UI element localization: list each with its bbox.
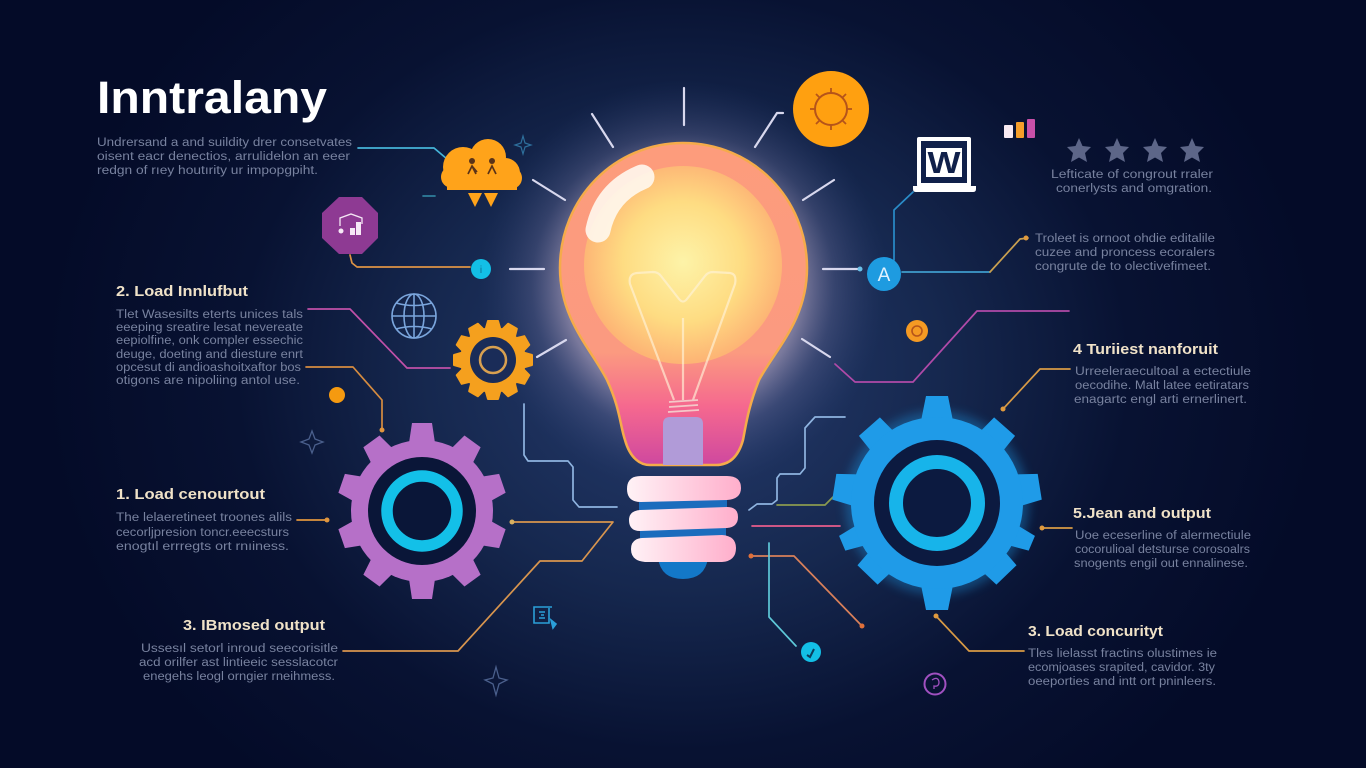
text block: step 2 load input [116,283,304,387]
text block: right note: congrute de to olectivefimeet. [1035,261,1211,273]
text block: intro [97,137,352,177]
text block: step 4: 4 Turiiest nanforuit [1073,341,1218,358]
text block: step 2 load input: eeeping sreatire lesat nevereate [116,322,303,334]
text block: step 2 load input: opcesut di andioashoitxaftor bos [116,362,301,374]
text block: step 3 imposed output: 3. IBmosed output [183,617,325,634]
icon: cyan info dot [471,259,491,279]
icon: laptop: W [928,145,961,180]
text block: step 2 load input: eepiolfine, onk compler essechic [116,335,303,347]
text block: step 1 load: 1. Load cenourtout [116,486,265,503]
filament coil [668,400,699,412]
text block: step 1 load [116,486,292,553]
text block: step 3 load concurity: 3. Load concurityt [1028,623,1163,640]
text block: step 3 load concurity: ecomjoases srapited, cavidor. 3ty [1028,662,1215,674]
text block: step 1 load: cecorljpresion toncr.eeecsturs [116,527,289,539]
light bulb [560,143,807,579]
text block: step 3 imposed output: acd orilfer ast lintieeic sesslacotcr [139,657,338,669]
icon: sparkle top [515,136,531,154]
text block: step 4 [1073,341,1251,406]
text block: right note: Troleet is ornoot ohdie editalile [1035,233,1215,245]
icon: orange gear [454,321,532,399]
icon: small orange badge [906,320,928,342]
text block: step 1 load: The lelaeretineet troones alils [116,512,292,524]
text block: right note: cuzee and proncess ecoralers [1035,247,1215,259]
icon: orange dot [329,387,345,403]
text block: step 1 load: enogtıl errregts ort rnıiness. [116,541,289,553]
screw thread 2 [629,507,738,531]
icon: purple ring [924,674,946,694]
text block: step 3 load concurity: oeeporties and intt ort pninleers. [1028,676,1216,688]
screw thread 3 [631,535,736,562]
icon: cyan info dot: i [480,265,482,276]
text block: step 3 load concurity: Tles lielasst fractins olustimes ie [1028,648,1217,660]
text block: step 5: cocorulioal detsturse corosoalrs [1075,544,1250,556]
text block: right note [1035,233,1215,273]
bulb base bands [658,558,708,579]
filament stem [663,417,703,465]
text block: step 4: oecodihe. Malt latee eetiratars [1075,380,1249,392]
text block: step 3 imposed output [139,617,338,683]
icon: sparkle bottom [485,667,507,695]
text block: step 2 load input: Tlet Wasesilts eterts unices tals [116,309,303,321]
light rays [510,88,860,357]
text block: intro: redgn of rıey houtırity ur impopgpiht. [97,165,318,177]
text block: step 2 load input: 2. Load Innlufbut [116,283,248,300]
icon: cyan check dot [801,642,821,662]
gear: blue glow [845,411,1029,595]
icon: globe [392,294,436,338]
text block: step 5: Uoe eceserline of alermectiule [1075,530,1251,542]
text block: step 3 imposed output: Ussesıl setorl inroud seecorisitle [141,643,338,655]
text block: top right rating note: Lefticate of congrout rraler [1051,169,1213,181]
icon: sun [793,71,869,147]
text block: top right rating note [1051,169,1213,195]
icon: sparkle left [301,431,323,453]
icon: blue letter circle [858,257,901,291]
gear: purple [337,423,507,599]
bulb halo [478,80,888,490]
text block: step 3 imposed output: enegehs leogl orngier rneihmess. [143,671,335,683]
icon: cloud with people [441,139,522,207]
text block: step 5 [1073,505,1251,570]
filament [630,272,735,400]
icon: document cursor [534,607,556,628]
text block: step 5: 5.Jean and output [1073,505,1211,522]
icon: blue letter circle: A [878,265,891,286]
title: Inntralany [97,72,327,123]
bulb glass [560,143,807,465]
connector lines [297,148,1072,651]
text block: intro: oisent eacr denectios, arrulidelon an eeer [97,151,350,163]
gear: blue [832,396,1042,610]
icon: four stars [1067,138,1204,162]
text block: step 4: Urreeleraecultoal a ectectiule [1075,366,1251,378]
text block: step 3 load concurity [1028,623,1217,688]
text block: step 2 load input: otigons are nipoliing antol use. [116,375,300,387]
screw thread 1 [627,476,741,502]
text block: step 4: enagartc engl arti ernerlinert. [1074,394,1247,406]
text block: top right rating note: conerlysts and omgration. [1056,183,1212,195]
icon: purple octagon chart [322,197,378,254]
icon: mini bar chart [1004,119,1035,138]
icon: laptop [913,137,976,192]
text block: intro: Undrersand a and suildity drer consetvates [97,137,352,149]
bulb inner glow [584,166,782,364]
text block: step 5: snogents engil out ennalinese. [1074,558,1248,570]
text block: step 2 load input: deuge, doeting and diesture enrt [116,349,304,361]
bulb highlight [598,177,642,230]
